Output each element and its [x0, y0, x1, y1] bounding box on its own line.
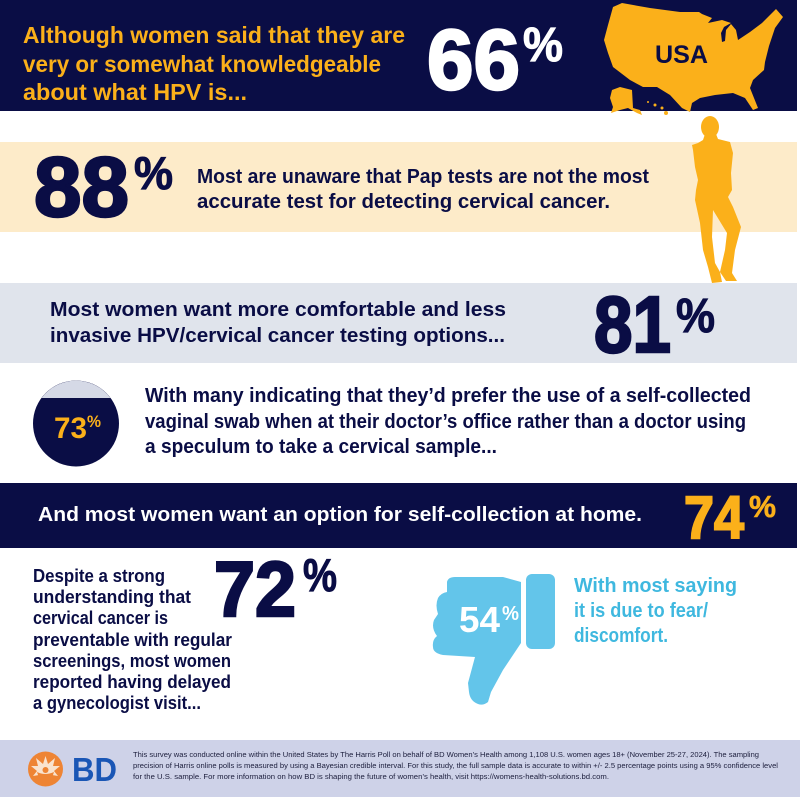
stat: 72 percent: %: [303, 549, 337, 601]
panel: footer: [0, 740, 800, 797]
text: fear and discomfort: it is due to fear/: [574, 600, 708, 622]
text: swab preference statement: [145, 384, 751, 458]
stat: 74 percent: %: [749, 489, 776, 524]
text: swab preference statement: vaginal swab when at their doctor’s office rather than a doctor using: [145, 410, 746, 433]
icon: woman silhouette: [692, 116, 741, 283]
panel: top knowledge banner: [0, 0, 797, 115]
text: fear and discomfort: discomfort.: [574, 625, 668, 647]
icon: BD sun logo: [28, 752, 63, 786]
heading: knowledge statement: Although women said that they are: [23, 22, 405, 48]
label: USA: USA: [655, 41, 708, 69]
text: Pap test statement: [197, 165, 649, 213]
text: testing options statement: invasive HPV/cervical cancer testing options...: [50, 324, 505, 347]
heading: knowledge statement: [23, 22, 405, 105]
text: delayed gynecologist visit: Despite a strong: [33, 566, 165, 586]
icon: USA map: [604, 3, 783, 115]
heading: knowledge statement: very or somewhat knowledgeable: [23, 51, 381, 77]
text: fear and discomfort: [574, 575, 737, 647]
text: swab preference statement: a speculum to take a cervical sample...: [145, 435, 497, 458]
chart: 73 percent circle: %: [87, 412, 101, 431]
text: testing options statement: [50, 298, 506, 347]
text: fear and discomfort: With most saying: [574, 575, 737, 597]
stat: 81 percent: %: [676, 290, 715, 343]
text: Pap test statement: accurate test for detecting cervical cancer.: [197, 190, 610, 213]
icon: thumbs down with 54 percent: 54: [459, 599, 500, 640]
text: delayed gynecologist visit: a gynecologist visit...: [33, 693, 201, 713]
text: delayed gynecologist visit: cervical cancer is: [33, 608, 168, 628]
heading: knowledge statement: about what HPV is...: [23, 79, 247, 105]
stat: 88 percent: [34, 140, 173, 234]
text: survey methodology note: This survey was conducted online within the United States by The Harris Poll on behalf of BD Women’s Health among 1,108 U.S. women ages 18+ (November 25-27, 2024). The sampling: [133, 750, 759, 759]
icon: thumbs down with 54 percent: [433, 574, 555, 705]
chart: 73 percent circle: 73: [54, 412, 87, 445]
stat: 88 percent: %: [134, 147, 173, 199]
text: Pap test statement: Most are unaware that Pap tests are not the most: [197, 165, 649, 188]
text: delayed gynecologist visit: screenings, most women: [33, 651, 231, 671]
stat: 88 percent: 88: [34, 140, 129, 234]
stat: 66 percent: 66: [427, 13, 520, 108]
panel: self-collection at home band: [0, 483, 797, 551]
stat: 66 percent: [427, 13, 563, 108]
text: delayed gynecologist visit: preventable with regular: [33, 630, 232, 650]
text: survey methodology note: precision of Harris online polls is measured by using a Bayesian credible interval. For this study, the full sample data is accurate to within +/- 2.5 percentage points using a 95% confidence level: [133, 761, 778, 770]
text: testing options statement: Most women want more comfortable and less: [50, 298, 506, 321]
panel: 73 percent self-collected swab: [33, 380, 751, 466]
panel: Pap test awareness band: [0, 140, 797, 234]
text: swab preference statement: With many indicating that they’d prefer the use of a self-collected: [145, 384, 751, 407]
stat: 66 percent: %: [523, 19, 563, 72]
text: delayed gynecologist visit: [33, 566, 232, 713]
text: delayed gynecologist visit: reported having delayed: [33, 672, 231, 692]
logo: BD wordmark: BD: [72, 751, 117, 788]
text: survey methodology note: [133, 750, 778, 781]
panel: comfortable testing band: [0, 280, 797, 369]
stat: 81 percent: 81: [594, 280, 671, 369]
text: survey methodology note: for the U.S. sample. For more information on how BD is shaping the future of women’s health, visit https://womens-health-solutions.bd.com.: [133, 772, 609, 781]
text: self-collection statement: And most women want an option for self-collection at home.: [38, 503, 642, 526]
stat: 72 percent: 72: [214, 545, 296, 633]
chart: 73 percent circle: [33, 380, 119, 466]
stat: 74 percent: 74: [684, 484, 745, 551]
text: delayed gynecologist visit: understanding that: [33, 587, 191, 607]
icon: thumbs down with 54 percent: %: [502, 603, 519, 625]
